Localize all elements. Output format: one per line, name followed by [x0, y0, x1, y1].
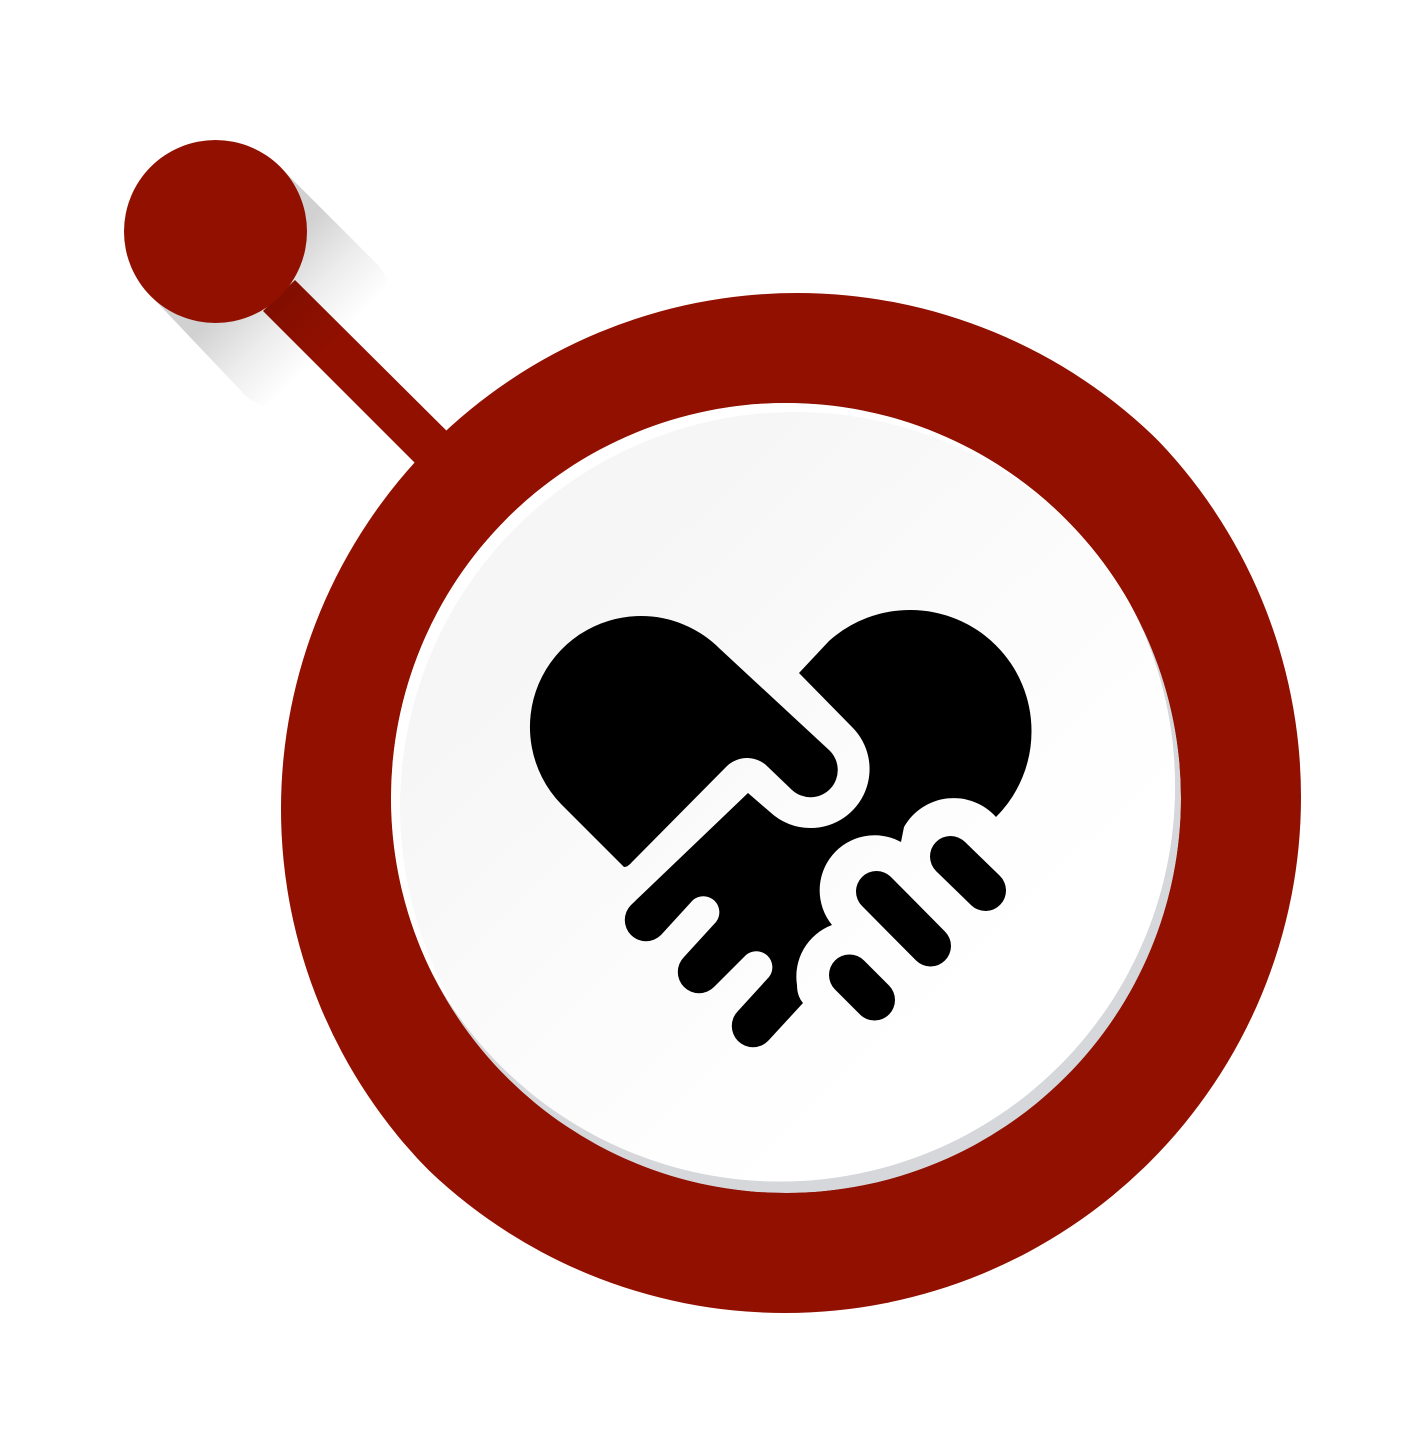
- finger pill long: [876, 892, 930, 946]
- inner disc: [385, 392, 1190, 1202]
- connector stem: [263, 280, 480, 496]
- finger pill top: [950, 856, 986, 890]
- left hand: [530, 616, 838, 867]
- right hand and fingers: [625, 610, 1032, 1047]
- long shadow of pin head: [151, 167, 387, 405]
- icon: heart handshake: [530, 610, 1032, 1047]
- pin head circle: [124, 140, 307, 323]
- outer red ring: [281, 293, 1313, 1325]
- badge illustration: [124, 140, 1301, 1313]
- finger pill bottom: [850, 975, 874, 1000]
